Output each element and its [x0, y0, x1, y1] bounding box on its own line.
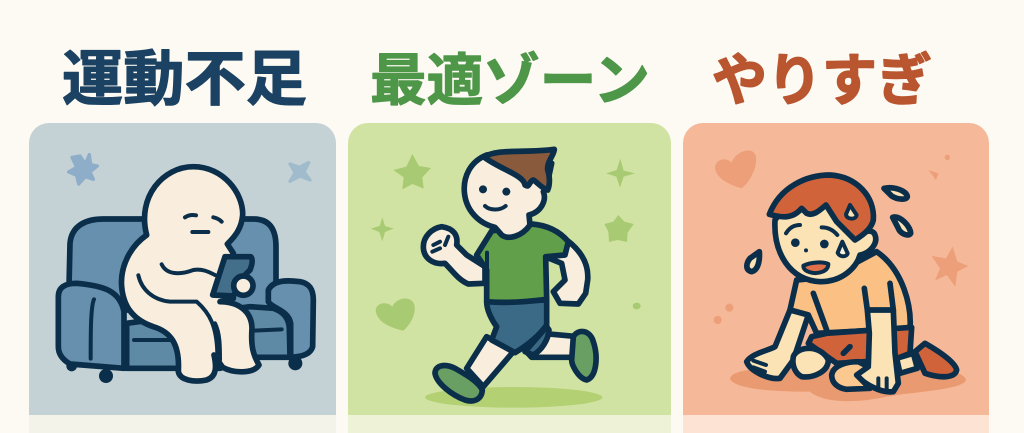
shirt body — [790, 252, 910, 333]
illustration: runner — [423, 149, 596, 401]
illustration: person with phone — [121, 167, 259, 381]
icons: stars and heart — [371, 154, 641, 331]
phone — [213, 257, 252, 296]
panel: optimal zone — [348, 123, 671, 433]
arm sleeve lines — [813, 283, 893, 330]
knees — [793, 348, 828, 377]
heading: 運動不足: 運動不足 — [62, 46, 307, 113]
icon: star left — [69, 155, 97, 184]
panel: too much — [683, 123, 989, 433]
shirt — [477, 224, 568, 302]
back leg and shoe — [522, 333, 578, 357]
arms and hands — [747, 310, 808, 379]
foot — [915, 343, 957, 377]
arm back with fist — [545, 240, 588, 304]
face — [786, 225, 837, 235]
shorts — [487, 300, 547, 353]
heading: 最適ゾーン: 最適ゾーン — [370, 49, 650, 112]
illustration: tired child — [747, 175, 957, 392]
heading: やりすぎ: やりすぎ — [712, 49, 932, 112]
icons: heart, star, dots — [714, 151, 968, 324]
ground shadow — [730, 368, 966, 401]
head — [775, 203, 876, 282]
illustration: sofa — [58, 219, 313, 383]
ground shadow — [425, 387, 602, 408]
shorts — [808, 327, 912, 363]
neck and head — [464, 152, 552, 237]
front leg and shoe — [467, 337, 513, 387]
sweat drops — [884, 188, 907, 199]
icon: star right — [290, 163, 310, 181]
face — [185, 215, 222, 232]
arm front with fist — [423, 227, 485, 284]
panel: lack of exercise — [29, 123, 336, 433]
